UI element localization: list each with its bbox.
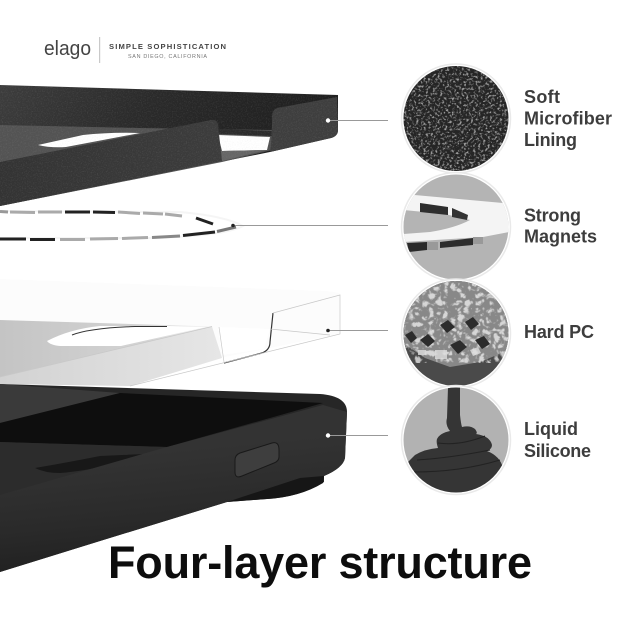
label: strong magnets [524,206,597,246]
callout lines with dots [231,118,388,438]
camera cutout [38,133,140,147]
circle: magnet close-up [402,172,510,282]
circle: liquid silicone pour [402,386,510,494]
layer: magnet ring [0,211,243,240]
front rim highlight [0,405,347,572]
label: liquid silicone [524,419,591,461]
label: soft microfiber lining [524,87,612,150]
circle: microfiber texture [402,64,510,173]
side button [235,443,279,477]
label: liquid silicone: Silicone [524,441,591,461]
camera opening [47,326,206,346]
label: soft microfiber lining: Microfiber [524,108,612,128]
case floor [0,442,167,498]
title: Four-layer structure [108,537,532,588]
label: soft microfiber lining: Lining [524,130,577,150]
layer: microfiber lining case [0,85,340,207]
clear edge lines [0,295,340,386]
inner floor shadow [35,454,145,473]
label: hard PC: Hard PC [524,322,594,342]
layer: clear hard PC case [0,279,340,386]
brand logo header [44,37,226,63]
layer: liquid silicone case [0,384,347,572]
button cutout [218,135,270,151]
right wall [270,97,338,152]
circle: hard PC granules [402,279,510,388]
location: SAN DIEGO, CALIFORNIA [128,54,207,60]
label: strong magnets: Strong [524,206,581,226]
label: liquid silicone: Liquid [524,419,578,439]
tagline: SIMPLE SOPHISTICATION [109,42,226,51]
button opening [218,327,270,355]
label: strong magnets: Magnets [524,226,597,246]
case interior [0,384,120,423]
logo wordmark: elago [44,38,91,60]
case floor [0,125,272,206]
front wall [0,120,222,206]
label: soft microfiber lining: Soft [524,87,560,107]
clear case floor [0,320,212,377]
